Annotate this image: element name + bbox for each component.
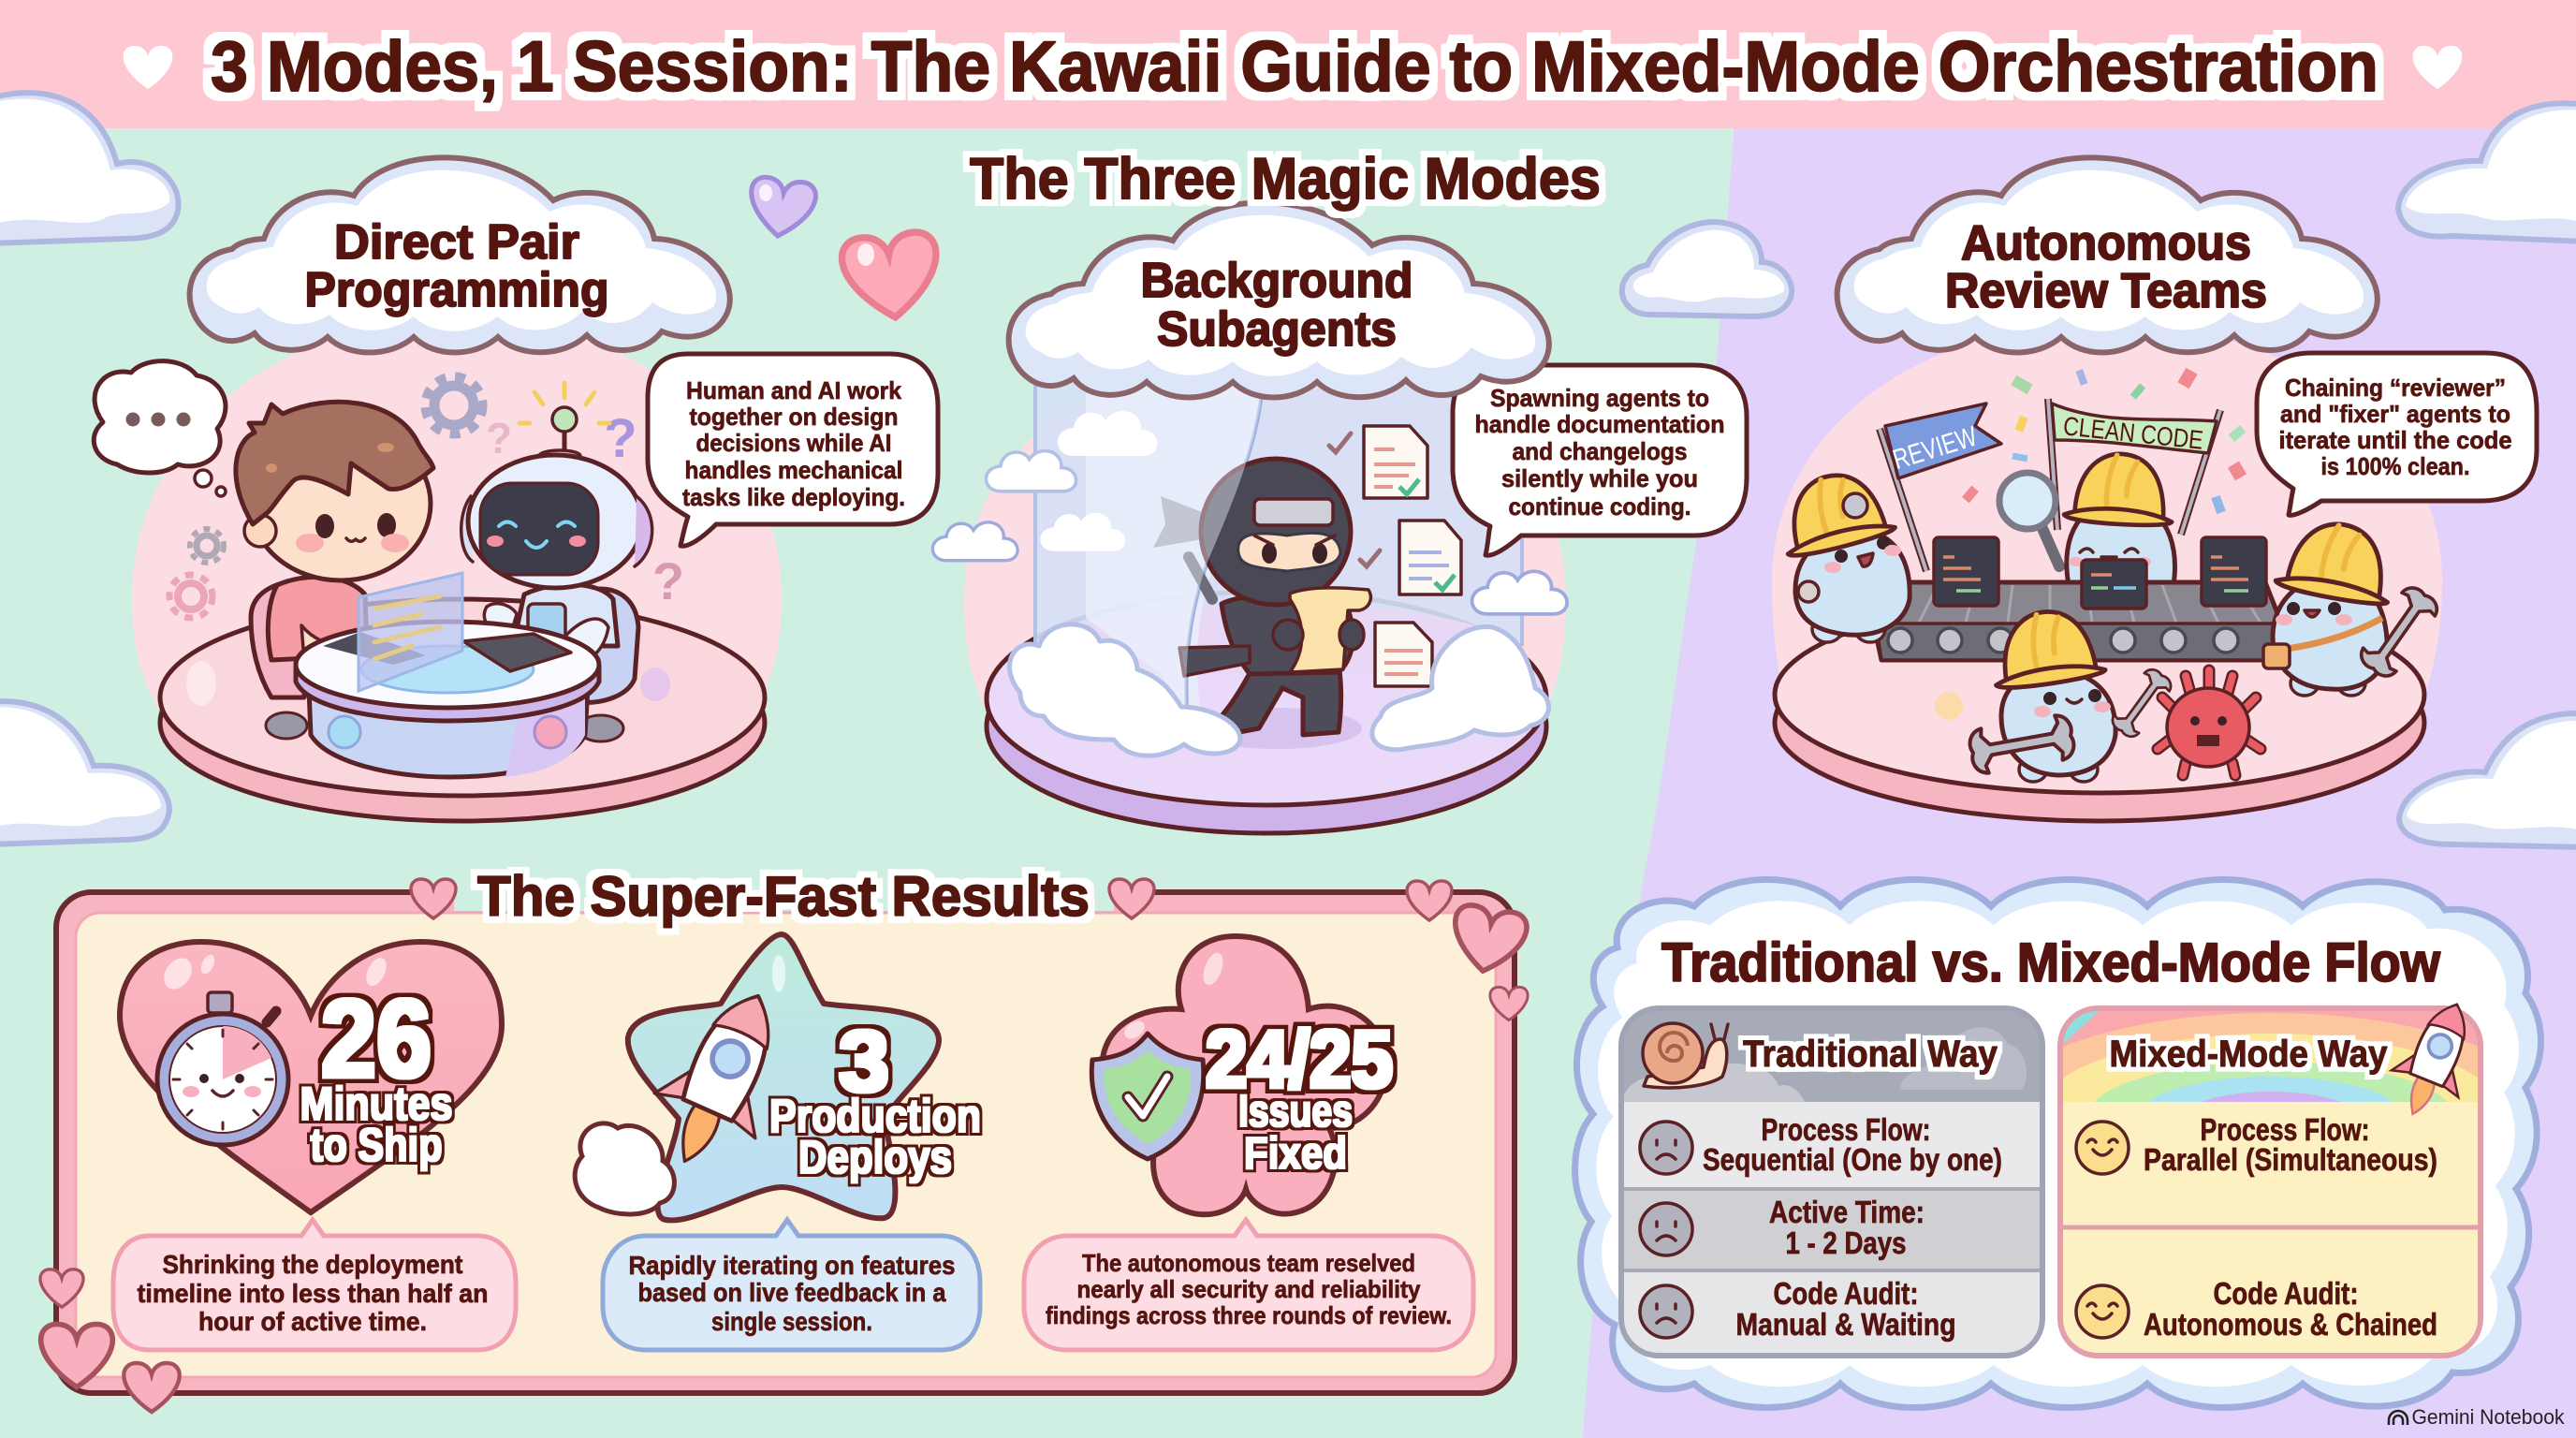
label: Production: [769, 1090, 981, 1142]
heading: the three magic modes: The Three Magic Modes: [970, 147, 1601, 212]
speech bubble: [648, 354, 938, 546]
heart: white title left: [124, 46, 172, 89]
row text: [2144, 1112, 2437, 1342]
icon: stopwatch: [157, 992, 288, 1145]
documents: [1329, 426, 1461, 686]
star highlight: [772, 955, 785, 992]
banner: clean code: [2048, 399, 2220, 535]
row faces: [1640, 1122, 1692, 1338]
flower shape: [1103, 936, 1386, 1214]
heading cloud: Subagents: [1157, 302, 1397, 357]
row text: Code Audit:: [2213, 1276, 2359, 1311]
row text: [1703, 1112, 2002, 1342]
icon: shield: [1091, 1034, 1204, 1159]
watermark: gemini notebook: Gemini Notebook: [2411, 1405, 2565, 1429]
panel interior: [76, 913, 1496, 1377]
idea rays: [520, 383, 609, 423]
glass cylinder: [1035, 376, 1522, 740]
row text: Code Audit:: [1773, 1276, 1919, 1311]
number: 26: [321, 977, 432, 1101]
curtain overlay: [1133, 376, 1264, 740]
icon: smoke cloud: [575, 1123, 674, 1214]
table: [296, 622, 599, 777]
flower highlights: [1121, 950, 1227, 1042]
heading cloud: [1837, 157, 2378, 352]
speech bubble: decisions while AI: [696, 429, 891, 457]
chair: [251, 580, 304, 697]
callout: autonomous team: [1024, 1220, 1473, 1350]
fixer bot right: [2263, 514, 2442, 696]
speech bubble: Chaining “reviewer”: [2285, 374, 2506, 402]
header rainbow: [2063, 1011, 2478, 1102]
stat: 3 production deploys: [575, 934, 981, 1220]
number: 3: [839, 1014, 889, 1109]
speech bubble: iterate until the code: [2278, 426, 2512, 454]
row text: Autonomous & Chained: [2144, 1307, 2437, 1342]
callout: iterating: Rapidly iterating on features: [629, 1251, 955, 1280]
scalloped frame: [1575, 880, 2540, 1408]
panel frame: [56, 892, 1515, 1393]
thought bubble: [94, 361, 226, 496]
callout: autonomous team: findings across three rounds of review.: [1046, 1301, 1452, 1329]
label line 2: Deploys: [798, 1131, 952, 1183]
backdrop egg: [964, 356, 1566, 749]
small clouds: [932, 411, 1567, 614]
speech bubble: [1453, 365, 1747, 555]
platform: [987, 592, 1546, 833]
number: 24/25: [1206, 1015, 1393, 1105]
backdrop egg: [1772, 323, 2442, 749]
speech bubble: is 100% clean.: [2321, 452, 2469, 480]
speech bubble: Human and AI work: [686, 376, 902, 404]
background clouds: [0, 93, 2576, 847]
header label: Traditional Way: [1743, 1034, 1998, 1075]
heading backing: [454, 875, 1114, 911]
banner: clean code: CLEAN CODE: [2062, 411, 2204, 455]
label: Minutes: [300, 1078, 453, 1130]
heading cloud: Autonomous: [1961, 216, 2251, 271]
robot: [461, 407, 652, 662]
question marks: [486, 408, 684, 610]
foam clouds: [1010, 624, 1548, 756]
conveyor belt: [1874, 582, 2281, 660]
heading cloud: Review Teams: [1945, 264, 2267, 318]
border: [2060, 1008, 2481, 1356]
question marks: ?: [652, 551, 684, 610]
row text: Manual & Waiting: [1735, 1307, 1956, 1342]
label line 2: to Ship: [311, 1119, 442, 1171]
confetti: [1962, 368, 2247, 514]
row text: Sequential (One by one): [1703, 1142, 2002, 1177]
header: [1621, 1008, 2042, 1105]
person: [236, 402, 433, 666]
callout: shipping: hour of active time.: [198, 1307, 427, 1336]
heading cloud: Programming: [305, 263, 608, 317]
heading cloud: [1009, 202, 1549, 397]
code boxes: [1934, 537, 2266, 609]
callout: autonomous team: nearly all security and reliability: [1076, 1275, 1421, 1303]
platform: [160, 599, 765, 821]
ninja: [1153, 459, 1370, 735]
speech bubble: silently while you: [1501, 464, 1698, 492]
callout: shipping: Shrinking the deployment: [163, 1250, 462, 1279]
speech bubble: [2257, 353, 2537, 515]
icons: gears: [169, 376, 483, 618]
reviewer bot left: [1772, 463, 1910, 642]
panel: super-fast results: [40, 865, 1530, 1412]
rows: [1621, 1102, 2042, 1356]
heading: Traditional vs. Mixed-Mode Flow: [1661, 932, 2441, 993]
speech bubble: Spawning agents to: [1490, 384, 1709, 412]
card: mixed-mode way: [2057, 1003, 2483, 1358]
speech bubble: handles mechanical: [685, 456, 902, 484]
card: traditional way: [1621, 1008, 2042, 1356]
robot chair: [580, 589, 638, 702]
star shape: [628, 934, 939, 1220]
stat: 26 minutes: [120, 942, 502, 1212]
callout: autonomous team: The autonomous team reselved: [1082, 1249, 1415, 1277]
rows: [2060, 1102, 2481, 1356]
backdrop egg: [132, 318, 782, 758]
holographic screen: [359, 573, 462, 691]
border: [1621, 1008, 2042, 1356]
panel: autonomous review teams: [1772, 157, 2537, 821]
speech bubble: and "fixer" agents to: [2280, 400, 2510, 428]
platform: [1775, 596, 2424, 821]
label: Issues: [1238, 1087, 1353, 1137]
row text: 1 - 2 Days: [1786, 1225, 1906, 1260]
row text: Process Flow:: [1762, 1112, 1930, 1147]
speech bubble: continue coding.: [1509, 492, 1690, 521]
panel: background subagents: [932, 202, 1747, 833]
row text: Process Flow:: [2200, 1112, 2370, 1147]
row text: Parallel (Simultaneous): [2144, 1142, 2437, 1177]
question marks: ?: [486, 414, 512, 462]
red bug: [2158, 670, 2261, 775]
heart: pink: [840, 230, 943, 322]
speech bubble: together on design: [689, 403, 899, 431]
callout: iterating: based on live feedback in a: [638, 1278, 946, 1307]
reviewer bot centre: [2064, 450, 2176, 585]
icon: rocket: [635, 974, 809, 1183]
heart: white title right: [2413, 46, 2462, 89]
question marks: ?: [604, 408, 637, 469]
icon: magnifier: [1999, 473, 2059, 566]
decorative hearts: [40, 879, 1530, 1412]
heading cloud: [190, 157, 730, 352]
title: 3 Modes, 1 Session: The Kawaii Guide to Mixed-Mode Orchestration: [211, 27, 2378, 107]
heart shape: [120, 942, 502, 1212]
flag: review: [1880, 404, 2001, 571]
speech bubble: and changelogs: [1513, 437, 1687, 465]
title band: [0, 0, 2576, 128]
callout: shipping: timeline into less than half an: [137, 1279, 489, 1308]
icon: rocket: [2379, 991, 2490, 1127]
heading cloud: Direct Pair: [334, 215, 579, 270]
callout: iterating: [603, 1220, 980, 1350]
heading: The Super-Fast Results: [477, 865, 1090, 928]
label line 2: Fixed: [1244, 1129, 1347, 1179]
stat: 24/25 issues fixed: [1091, 936, 1393, 1214]
heart highlights: [158, 952, 390, 994]
flag: review: REVIEW: [1889, 421, 1982, 476]
callout: shipping: [113, 1220, 516, 1350]
speech bubble: tasks like deploying.: [682, 483, 905, 511]
speech bubble: handle documentation: [1475, 410, 1724, 438]
panel: traditional vs mixed-mode comparison: [1575, 880, 2552, 1408]
heading cloud: Background: [1140, 254, 1413, 308]
row faces: [2076, 1122, 2129, 1338]
heart: purple: [746, 175, 817, 241]
icon: snail: [1643, 1023, 1728, 1088]
header label: Mixed-Mode Way: [2110, 1034, 2388, 1075]
row text: Active Time:: [1769, 1195, 1925, 1229]
callout: iterating: single session.: [711, 1307, 872, 1336]
panel: direct pair programming: [94, 157, 938, 821]
fixer bot front: [1968, 605, 2174, 782]
